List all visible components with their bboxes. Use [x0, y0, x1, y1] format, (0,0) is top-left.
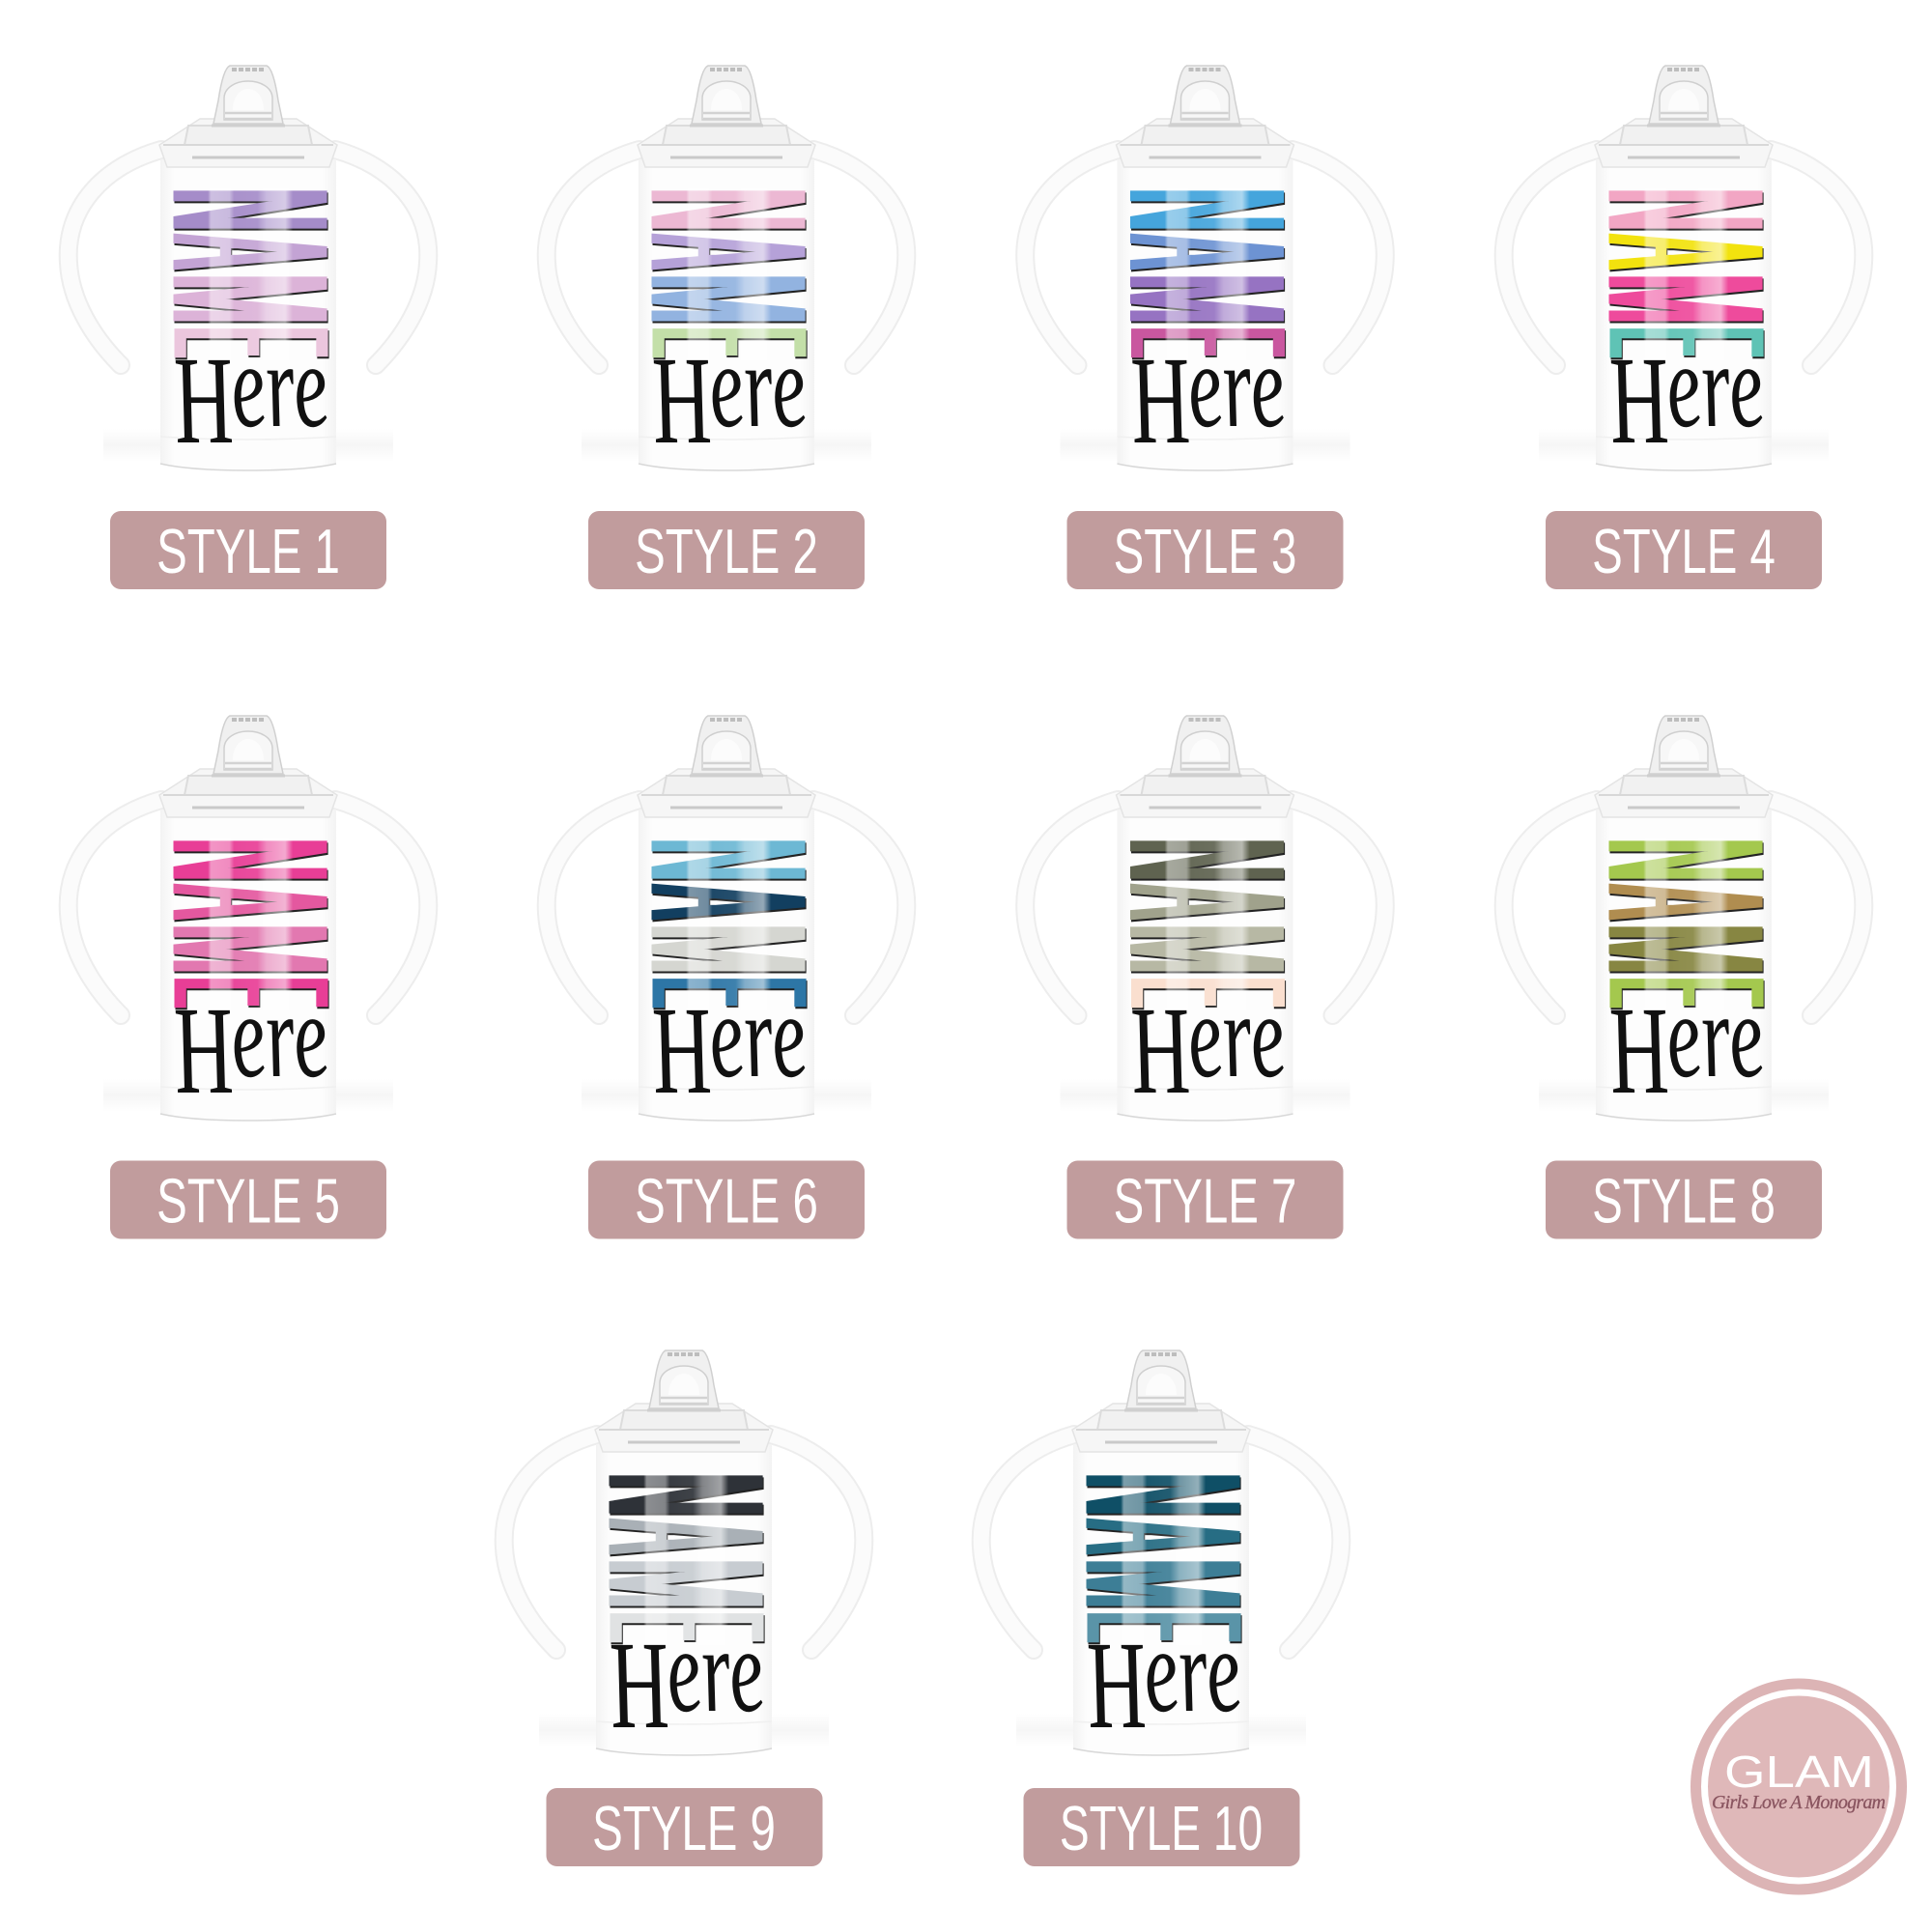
cup print: NAME: [120, 189, 381, 356]
label pill: style 9: STYLE 9: [592, 1794, 776, 1864]
cup print: NAME: M: [1555, 925, 1814, 973]
cup print: NAME: N: [1555, 189, 1814, 231]
cup print: NAME: M: [120, 274, 379, 323]
icon: sippy cup: [69, 66, 428, 470]
panel: style 9: [504, 1350, 864, 1866]
cup print: NAME: A: [556, 1520, 816, 1552]
sheen on print: [652, 838, 807, 1010]
label pill: style 6: [588, 1161, 865, 1238]
cup print: Here: ere: [1133, 1603, 1249, 1737]
label pill: style 1: [110, 511, 386, 589]
icon: sippy cup: [504, 1350, 864, 1755]
label pill: style 10: [1024, 1788, 1300, 1866]
cup print: Here: ere: [1656, 968, 1772, 1102]
cup print: Here: H: [1119, 981, 1203, 1120]
cup print: NAME: A: [599, 886, 859, 918]
logo: GLAM badge: [1690, 1679, 1907, 1895]
cup print: NAME: M: [120, 925, 379, 973]
cup print: NAME: E: [1079, 978, 1338, 1007]
cup print: Here: ere: [220, 318, 336, 452]
cup print: NAME: N: [120, 839, 379, 881]
icon: sippy cup: [69, 716, 428, 1121]
logo wordmark: GLAM: [1724, 1747, 1874, 1797]
panel: style 8: [1504, 716, 1863, 1238]
cup print: Here: H: [161, 331, 245, 469]
cup print: NAME: E: [122, 327, 381, 356]
label pill: style 2: [588, 511, 865, 589]
cup print: NAME: E: [600, 327, 859, 356]
cup print: Here: H: [1597, 331, 1681, 469]
cup print: Here: H: [1119, 331, 1203, 469]
cup print: NAME: N: [598, 189, 857, 231]
cup print: NAME: M: [598, 274, 857, 323]
cup print: NAME: E: [600, 978, 859, 1007]
cup print: Here: ere: [698, 968, 814, 1102]
cup print: NAME: A: [599, 236, 859, 268]
cup print: Here: ere: [698, 318, 814, 452]
cup print: NAME: [120, 839, 381, 1007]
cup print: NAME: N: [598, 839, 857, 881]
panel: style 7: [1025, 716, 1385, 1238]
label pill: style 3: [1066, 511, 1343, 589]
cup print: Here: ere: [220, 968, 336, 1102]
panel: style 5: [69, 716, 428, 1238]
cup print: NAME: A: [1034, 1520, 1293, 1552]
label pill: style 8: [1546, 1161, 1822, 1238]
cup print: Here: H: [597, 1616, 681, 1754]
sheen on print: [610, 1473, 764, 1645]
cup print: NAME: E: [1557, 978, 1816, 1007]
label pill: style 7: STYLE 7: [1114, 1166, 1296, 1236]
cup print: NAME: E: [1035, 1612, 1293, 1641]
cup print: NAME: N: [1033, 1474, 1292, 1516]
panel: style 1: [69, 66, 428, 589]
label pill: style 8: STYLE 8: [1592, 1166, 1776, 1236]
sheen on print: [174, 188, 328, 360]
label pill: style 7: [1066, 1161, 1343, 1238]
icon: sippy cup: [1025, 66, 1385, 470]
cup print: NAME: N: [1077, 189, 1336, 231]
sheen on print: [1130, 838, 1285, 1010]
panel: style 3: [1025, 66, 1385, 589]
icon: sippy cup: [981, 1350, 1341, 1755]
cup print: Here: ere: [1177, 968, 1293, 1102]
cup print: NAME: N: [120, 189, 379, 231]
label pill: style 1: STYLE 1: [156, 517, 340, 587]
label pill: style 6: STYLE 6: [635, 1166, 818, 1236]
cup print: NAME: A: [121, 886, 381, 918]
cup print: NAME: E: [557, 1612, 816, 1641]
icon: sippy cup: [1025, 716, 1385, 1121]
logo tagline: Girls Love A Monogram: [1712, 1792, 1886, 1813]
label pill: style 4: [1546, 511, 1822, 589]
cup print: NAME: A: [1556, 886, 1816, 918]
label pill: style 2: STYLE 2: [635, 517, 818, 587]
cup print: NAME: A: [1078, 236, 1337, 268]
cup print: NAME: A: [1078, 886, 1337, 918]
cup print: NAME: [598, 189, 859, 356]
cup print: NAME: N: [1077, 839, 1336, 881]
sheen on print: [1609, 838, 1764, 1010]
cup print: NAME: [1077, 839, 1338, 1007]
cup print: NAME: E: [1079, 327, 1338, 356]
label pill: style 10: STYLE 10: [1060, 1793, 1263, 1863]
cup print: NAME: A: [121, 236, 381, 268]
cup print: NAME: [1555, 839, 1816, 1007]
panel: style 2: [547, 66, 906, 589]
cup print: NAME: [1077, 189, 1338, 356]
label pill: style 4: STYLE 4: [1592, 517, 1776, 587]
panel: style 4: [1504, 66, 1863, 589]
cup print: Here: ere: [1177, 318, 1293, 452]
panel: style 10: [981, 1350, 1341, 1866]
sheen on print: [652, 188, 807, 360]
icon: sippy cup: [547, 716, 906, 1121]
panel: style 6: [547, 716, 906, 1238]
cup print: Here: H: [161, 981, 245, 1120]
sheen on print: [174, 838, 328, 1010]
label pill: style 5: STYLE 5: [156, 1166, 340, 1236]
cup print: Here: ere: [1656, 318, 1772, 452]
cup print: NAME: E: [1557, 327, 1816, 356]
label pill: style 5: [110, 1161, 386, 1238]
sheen on print: [1087, 1473, 1241, 1645]
cup print: NAME: [1555, 189, 1816, 356]
cup print: NAME: M: [598, 925, 857, 973]
cup print: Here: H: [1597, 981, 1681, 1120]
cup print: NAME: [1033, 1474, 1293, 1641]
label pill: style 3: STYLE 3: [1114, 517, 1296, 587]
cup print: NAME: M: [1077, 925, 1335, 973]
cup print: NAME: N: [555, 1474, 814, 1516]
cup print: NAME: N: [1555, 839, 1814, 881]
icon: sippy cup: [1504, 716, 1863, 1121]
sheen on print: [1130, 188, 1285, 360]
cup print: NAME: M: [1555, 274, 1814, 323]
cup print: Here: H: [1074, 1616, 1158, 1754]
cup print: NAME: A: [1556, 236, 1816, 268]
cup print: Here: ere: [656, 1603, 772, 1737]
cup print: NAME: [598, 839, 859, 1007]
label pill: style 9: [547, 1788, 823, 1866]
cup print: Here: H: [639, 981, 724, 1120]
cup print: NAME: M: [555, 1559, 814, 1607]
cup print: Here: H: [639, 331, 724, 469]
cup print: NAME: M: [1077, 274, 1335, 323]
cup print: NAME: E: [122, 978, 381, 1007]
cup print: NAME: M: [1033, 1559, 1292, 1607]
icon: sippy cup: [1504, 66, 1863, 470]
icon: sippy cup: [547, 66, 906, 470]
cup print: NAME: [555, 1474, 816, 1641]
sheen on print: [1609, 188, 1764, 360]
